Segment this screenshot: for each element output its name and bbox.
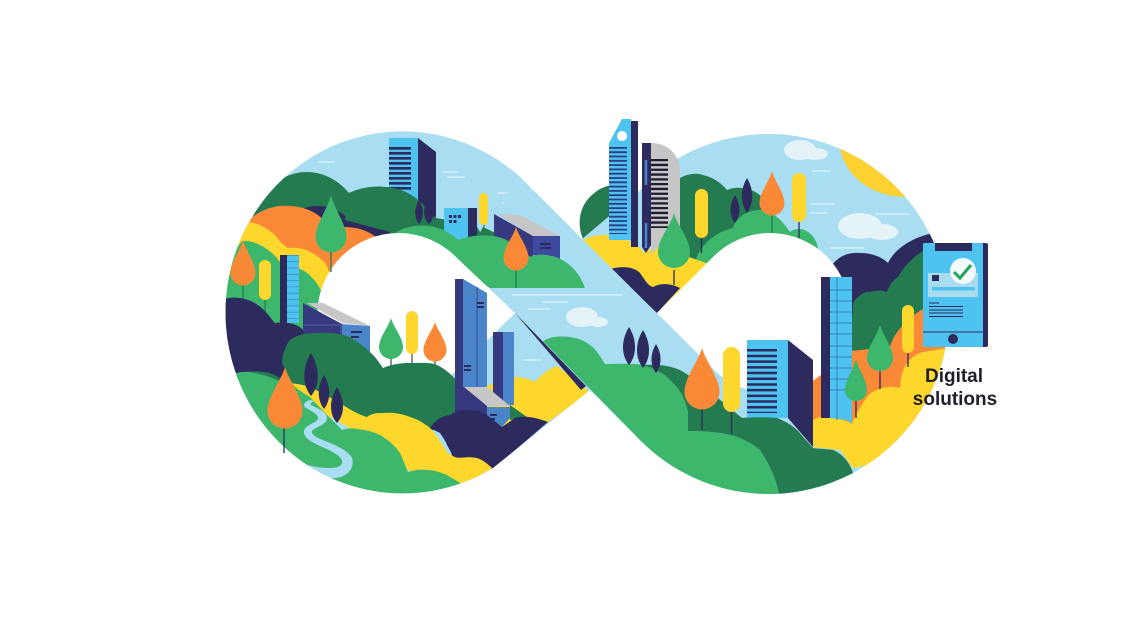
dark green strip on lower hill: [248, 371, 280, 380]
card icon: [932, 275, 939, 281]
yellow pill tree: [264, 298, 266, 312]
dark green hill over building base: [742, 417, 813, 450]
home button: [948, 334, 958, 344]
yellow pill tree: [907, 352, 909, 367]
small light blue building: [444, 208, 477, 244]
gray curved tower: [642, 143, 680, 255]
yellow pill tree: [730, 410, 732, 434]
home divider: [923, 331, 983, 333]
yellow pill tree: [411, 352, 413, 364]
green tree: [673, 270, 675, 285]
label: Digital solutions: solutions: [913, 389, 997, 410]
tower porthole: [617, 131, 627, 141]
dark green hill right lobe: [674, 174, 762, 296]
dark green hill under centre band: [642, 365, 853, 505]
gray roof: [464, 387, 510, 406]
lower block: [487, 407, 510, 427]
front: [747, 340, 788, 418]
right-side notch hill: [580, 185, 650, 260]
centre cloud: [566, 307, 608, 327]
navy side: [455, 279, 487, 425]
navy hill bottom: [430, 410, 548, 469]
orange tree: [242, 284, 244, 300]
tower grid: [830, 277, 852, 420]
orange hill right lobe: [813, 309, 946, 424]
check circle: [950, 258, 976, 284]
clouds: [784, 140, 898, 240]
yellow hills upper left: [226, 222, 329, 290]
right skyline tower: [609, 119, 638, 247]
navy hill left: [226, 298, 303, 380]
lower left trees: [268, 353, 343, 453]
spine accents: [645, 160, 647, 248]
label: Digital solutions: Digital: [925, 366, 983, 387]
front: [389, 138, 418, 204]
sky background: [226, 131, 946, 494]
window stripes: [651, 159, 668, 228]
card: [928, 273, 978, 297]
white hole right: [657, 233, 850, 393]
yellow hill beside towers: [487, 366, 589, 427]
roof: [497, 214, 560, 236]
side: [788, 340, 813, 447]
white hole left: [317, 233, 515, 395]
green lower hill: [236, 372, 461, 494]
left-lobe dark green hills: [240, 172, 444, 240]
navy hill behind orange: [304, 206, 390, 236]
side: [342, 324, 370, 355]
seam: [476, 287, 478, 387]
lower windows: [490, 414, 497, 420]
green arch hills: [696, 210, 818, 264]
slanted gray-roof building upper right of left lobe: [494, 214, 560, 260]
side: [533, 236, 560, 260]
river: [300, 400, 353, 478]
orange tree: [434, 361, 436, 367]
sky streaks: [318, 161, 909, 249]
curved gray body: [651, 143, 680, 255]
windows: [540, 243, 551, 249]
right front building: [747, 340, 813, 447]
tower behind orange hill: [821, 277, 852, 423]
navy hill under yellow: [610, 267, 680, 313]
blue face: [463, 279, 487, 387]
sun: [840, 148, 906, 197]
orange hill upper left: [240, 206, 376, 273]
dark green hill lower left: [282, 333, 456, 430]
green tree small: [855, 400, 857, 418]
card bar: [932, 287, 975, 290]
green tree large: [879, 370, 881, 389]
building top left lobe: [389, 138, 436, 217]
navy trees: [304, 353, 318, 396]
top notch: [935, 243, 972, 251]
text lines: [929, 303, 963, 316]
sky band lines: [512, 295, 623, 360]
dark green hill behind slanted building: [478, 227, 510, 246]
second tower: [493, 332, 514, 405]
yellow pill tree: [700, 236, 702, 253]
stripes: [747, 349, 777, 413]
tall blue tower: [455, 279, 510, 427]
centre green band: [543, 336, 780, 500]
navy leaf trees top: [415, 198, 434, 224]
tower stripes: [609, 147, 627, 234]
front: [494, 214, 533, 258]
tower front: [609, 119, 631, 240]
orange tree: [701, 408, 703, 430]
windows: [351, 331, 362, 338]
orange tree: [283, 426, 285, 453]
tablet shadow side: [925, 243, 988, 347]
infinity landscape illustration: [226, 119, 996, 494]
green hill upper middle: [395, 226, 585, 288]
dark green hill by tablet: [852, 251, 923, 351]
side: [418, 138, 436, 217]
check mark: [954, 265, 971, 278]
icon: tablet with check mark: [923, 243, 988, 347]
centre leaf trees: [623, 327, 660, 373]
navy hills right lobe: [833, 234, 934, 322]
central trees in hole: [379, 311, 446, 367]
left lobe upper trees: [230, 195, 528, 312]
green tree: [390, 358, 392, 367]
dark green patch beside building: [436, 218, 480, 236]
right lower trees: [684, 305, 914, 434]
navy spine: [642, 143, 651, 253]
green hill lower left: [226, 240, 321, 340]
yellow pill tree right: [798, 220, 800, 238]
navy sliver: [515, 313, 586, 390]
windows: [464, 302, 484, 371]
big green tree: [330, 250, 332, 272]
clipped landscape behind the loop holes: [226, 131, 946, 494]
outline: [304, 325, 341, 345]
gray-roof building lower left: [303, 303, 370, 355]
tower side: [631, 121, 638, 247]
yellow tree upper centre: [479, 193, 488, 236]
clipped lower landscape: [215, 298, 590, 430]
clipped foreground hills: [222, 336, 853, 505]
yellow hill right lobe: [813, 348, 946, 468]
yellow hill top centre: [583, 235, 707, 310]
yellow big hill: [290, 383, 493, 490]
front: [303, 303, 342, 345]
dark green hill in front of top building: [345, 187, 445, 240]
dark green wedge by tower: [510, 405, 527, 420]
roof: [307, 303, 370, 326]
orange tree: [771, 215, 773, 233]
navy trees: [730, 195, 740, 223]
sky band crossing: [504, 172, 654, 445]
right lobe top trees: [658, 171, 806, 285]
orange tree centre: [515, 270, 517, 288]
stripes: [389, 147, 411, 190]
left blue building: [280, 255, 299, 327]
tablet body: [923, 243, 983, 347]
